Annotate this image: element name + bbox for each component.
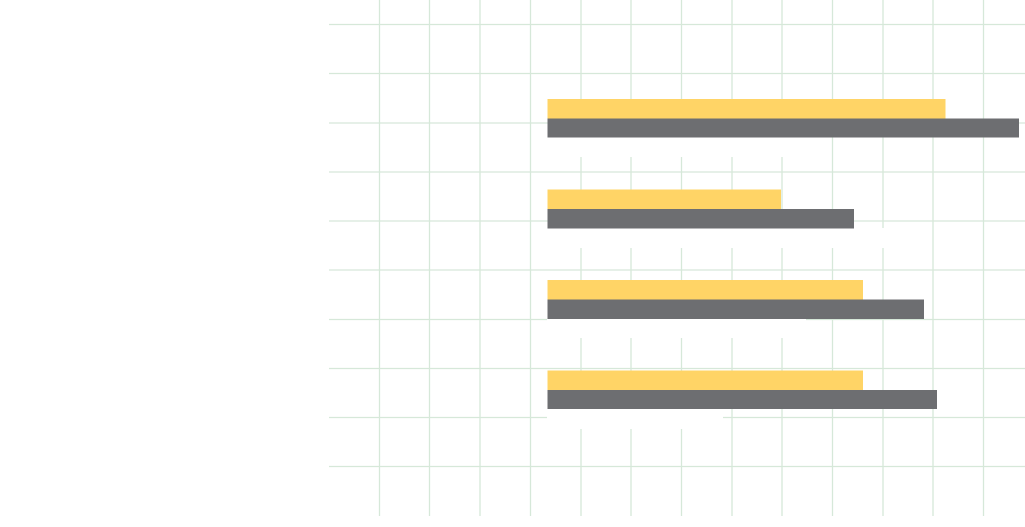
white gaps between bar groups bbox=[547, 137, 900, 429]
bar group 1 bbox=[548, 99, 1019, 138]
bar group 2 bbox=[548, 190, 854, 228]
bar group 4 bbox=[548, 370, 937, 409]
bar group 3 bbox=[548, 280, 924, 319]
